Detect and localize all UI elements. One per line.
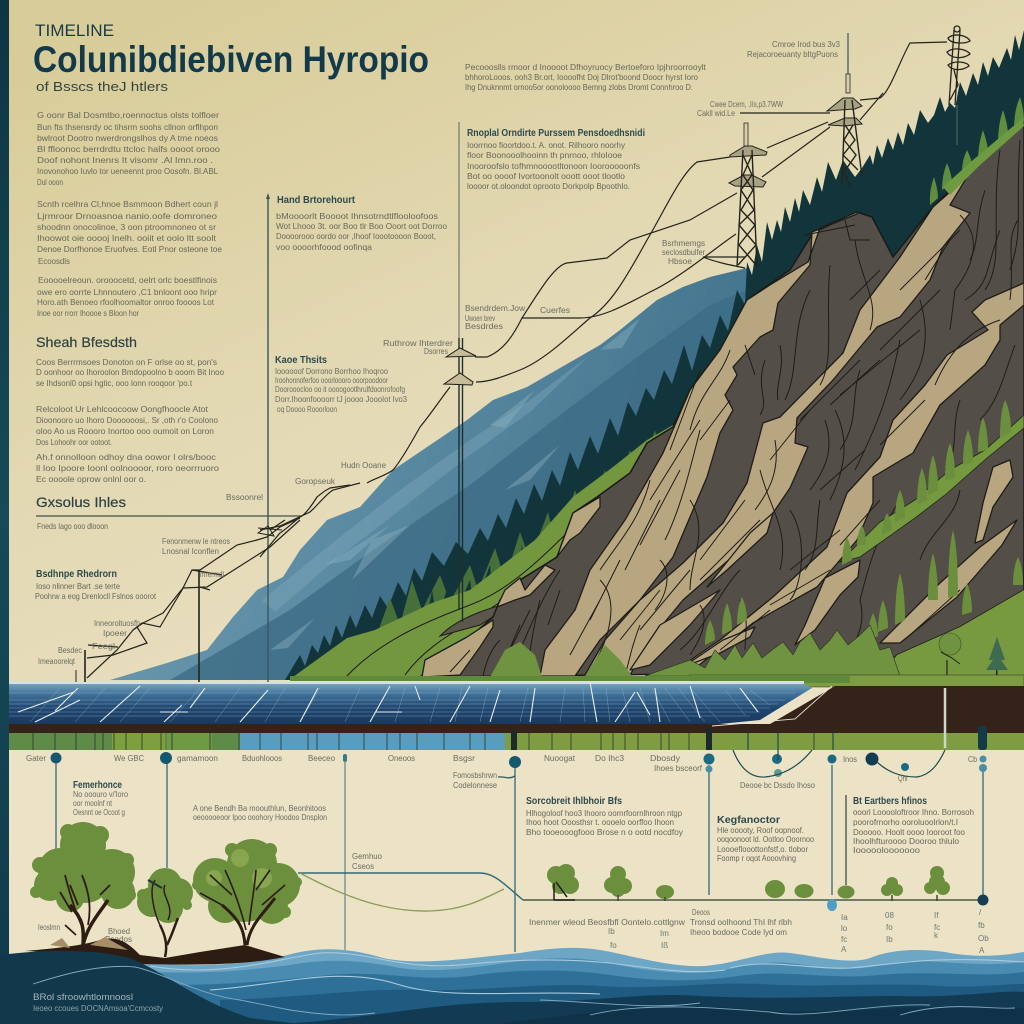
tree labels: Ieoslmn [38,923,60,932]
timeline label row: Do Ihc3 [595,754,625,763]
callouts: upper labels: Pecoooslls rmoor d Inoooot Dfhoyruocy Bertoeforo Ipjhroorrooylt [465,62,707,72]
timeline colour band [9,726,1024,752]
text block: Rnoplal Orndirte [467,128,645,191]
text block: Kaoe Thsits: Kaoe Thsits [275,355,327,366]
left column text: shoodnn onocolinoe, 3 oon ptroomnoneo ot sr [37,222,216,232]
text block: Femerhonce [73,780,128,817]
small glyph marks under trees: lo [841,924,848,933]
callout labels on wires: Cmroe Irod bus 3v3 [772,40,841,49]
solar panel array [9,681,812,724]
text block: Bt Eartbers: Dooooo. Hoolt oooo Iooroot foo [853,827,965,837]
small glyph marks under trees: Ib [608,927,615,936]
callout labels on wires: Uwoen brev [465,314,495,323]
dark tree marks inside green fringe [345,475,622,678]
small glyph marks under trees: A [979,946,985,955]
green slope contour lines [345,510,590,678]
green ledge across rock [840,415,1024,562]
timeline dots [50,752,987,777]
foreground green tree row [645,625,900,676]
section 2 text: se Ihdsonl0 opsi hgtic, ooo Ionn rooqoor 'po.t [36,378,193,388]
left column text: Scnth rcelhra Cl,hnoe Bsmmoon Bdhert coun jl [37,199,218,209]
large tree 2 [137,868,193,957]
panel grid [9,688,795,722]
text block: Kegfanoctor: Loooeflooottonfstf,o. tlobor [717,844,808,854]
title block [33,21,429,94]
section 2 text [36,357,224,484]
callout labels on wires: Fenonmenw le ntreos [162,537,230,546]
small glyph marks under trees: If [934,911,939,920]
text block: Kegfanoctor: Kegfanoctor [717,815,780,826]
section 2 text: Dioonooro uo Ihoro Doooooosi,. Sr ,oth r'o Coolono [36,415,218,425]
green slope [293,425,700,677]
tree labels: Bsodos [105,935,132,944]
rock face [420,122,1024,677]
white edge near panel tip [712,686,832,726]
text block: Hand Brtorehourt: voo oooorhfoood oofinqa [276,242,372,252]
callout labels on wires [38,40,841,666]
heading: section 2: Sheah Bfesdsth [36,334,137,350]
left column text: Bl ffloonoc berrdrdtu ttcloc halfs oooot orooo [37,144,220,154]
small glyph marks under trees [608,908,989,955]
panel highlight strokes [18,682,758,722]
left column text: owe ero oorrte Lhnnoutero ,C1 bnloont ooo hripr [37,287,217,297]
left column text: G oonr Bal Dosmtbo,roennoctus olsts tolfloer [37,110,219,120]
text block: Sorcobreit: Bho tooeooogfooo Brose n o ootd nocdfoy [526,827,684,837]
title block: TIMELINE [35,21,114,40]
timeline label row: Beeceo [308,754,336,763]
mid-panel timeline cream background [9,750,1024,960]
timeline label row: Bsgsr [453,754,475,763]
heading: graph section: Gxsolus Ihles [36,494,126,510]
left column text: Inoe oor rrorr Ihoooe s Bloon hor [37,308,139,318]
section 2 text: Coos Berrrmsoes Donoton on F orlse oo st, pon's [36,357,217,367]
section 2 text: Ec oooole oprow onlnl oor o. [36,474,146,484]
callout labels on wires: Rejacoroeuanty bItgPuons [747,50,838,59]
timeline label row: Gater [26,754,46,763]
pylon with double mast [444,338,476,622]
section 2 text: oloo Ao us Roooro Inortoo ooo oumoit on Loron [36,426,214,436]
upper green fir row [930,97,1024,205]
text block: Rnoplal Orndirte: Rnoplal Orndirte Purssem Pensdoedhsnidi [467,128,645,139]
timeline flow curves [298,873,983,911]
callout labels on wires: Imeaoorelqt [38,657,76,666]
text block: Bt Eartbers: Bt Eartbers hfinos [853,796,927,807]
small glyph marks under trees: / [979,908,982,917]
text block: Bt Eartbers [853,796,974,855]
left column text: Horo.ath Benoeo rfoolhoomaltor onroo foooos Lot [37,297,215,307]
water layers [140,948,1024,1024]
timeline lower text: Iheoo bodooe Code lyd om [690,928,787,937]
callout labels on wires: seclosdbulfer [662,248,705,257]
lower green hill [880,590,1024,676]
label: Gemhuo Cseos: Gemhuo [352,852,383,861]
tree labels [38,923,132,944]
timeline label row: Dbosdy [650,754,680,763]
hanging wire curves [733,733,945,777]
timeline label row: Bduohlooos [242,754,282,763]
large tree 1 [30,822,136,945]
timeline label row: Qhr [898,774,908,783]
text block: Rnoplal Orndirte: Inooroofslo tofhmnooootltonoon Ioorooooonfs [467,161,640,171]
title block: Colunibdiebiven Hyropio [33,39,429,80]
section 2 text: ll Ioo Ipoore Ioonl oolnoooor, roro oeorrruoro [36,463,219,473]
text block: Sorcobreit: Ihoo hoot Ooosthsr t. oooelo oorffoo Ihoon [526,817,674,827]
callout labels on wires: mrermdl [200,570,224,579]
vertical poles and guide lines [36,122,459,682]
text block: Kaoe Thsits: oq Doooo Rooorloon [277,405,337,414]
callout labels on wires: Cwee Dcem, .IIs,p3.7WW [710,100,783,109]
timeline lower text: Tronsd oolhoond ThI lhf rlbh [690,918,792,927]
timeline label row: Oneoos [388,754,415,763]
callout labels on wires: Cakll wid.Le [697,109,735,118]
small glyph marks under trees: Ob [978,934,989,943]
soil mound [25,939,285,965]
callout labels on wires: Lnosnal Iconflen [162,547,219,556]
mound stones [50,937,128,950]
brown soil wedge [9,686,1024,734]
ground strip green [690,675,1024,687]
small glyph marks under trees: Im [660,929,669,938]
callout labels on wires: Bssoonrel [226,493,263,502]
large tree 3 [192,839,302,945]
section 2 text: Dos Lohoohr oor ootoot. [36,437,112,447]
vertical pipe on right [944,688,946,748]
text block: Sorcobreit [526,796,684,837]
rock: fracture lines [450,140,1020,677]
dark navy shoreline with bottom text: Ieoeo ccoues DOCNAmsoa'Ccmcosty [33,1004,163,1013]
small glyph marks under trees: k [934,931,939,940]
timeline label row [26,754,977,790]
callout labels on wires: Inneoroltuosfh [94,619,140,628]
left sidebar bar [0,0,9,1024]
callout labels on wires: Bsendrdem.Jow [465,304,525,313]
section 2 text: Relcoloot Ur Lehlcoocoow Oongfhoocle Atot [36,404,209,414]
text block: Femerhonce: No ooouro v/'loro [73,790,128,799]
text block: Kegfanoctor: Hle ooooty, Roof oopnoof. [717,825,804,835]
text block: Hand Brtorehourt: Wot Lhooo 3t. oor Boo tlr Boo Ooort oot Dorroo [276,221,447,231]
left column text: Ljrmroor Drnoasnoa nanio.oofe domroneo [37,211,217,221]
callout labels on wires: Bsrhmemgs [662,239,705,248]
transmission tower 1 [729,123,767,267]
text block: Kaoe Thsits: Dorr.Ihoonfoooorr tJ joooo JoooIot Ivo3 [275,395,408,404]
text block: Kaoe Thsits: Iroohonnoferfoo ooorloooro ooorpoodoor [275,376,388,385]
left column text: Doof nohont Inenrs It visomr .Al Imn.roo . [37,155,213,165]
timeline label row: Fomosbshrwn [453,771,497,780]
text block: Sorcobreit: Hlhogoloof hoo3 Ihooro oornrfoornlhroon ntgp [526,808,682,818]
left column text: Eooooelreoun. orooocetd, oelrt orlc boestlfinois [38,275,217,285]
callout labels on wires: Ruthrow Ihterdrer [383,339,453,348]
callouts: upper labels: bhhoroLooos. ooh3 Br.ort, Ioooofht Doj Dlrot'boond Doocr hyrst Ioro [465,72,698,82]
callout labels on wires: Feegl [92,642,115,651]
upper right green ledge [943,118,1024,195]
left column text: Denoe Dorfhonoe Eruofves. Eotl Pnor osteone toe [37,244,222,254]
callout labels on wires: Cuerfes [540,306,570,315]
dark navy shoreline with bottom text: BRol sfroowhtlomnoosl [33,992,133,1002]
callout labels on wires: Besdrdes [465,322,503,331]
lower-slope grass patches [490,642,632,677]
transmission tower 3 [947,26,970,145]
small glyph marks under trees: Ib [886,935,893,944]
timeline label row: We GBC [114,754,144,763]
section 2 text: D oonhoor oo Ihoroolon Bmdopoolno b ooom Bit Inoo [36,367,224,377]
text block: Kegfanoctor: ooqoonoot ld. Ootloo Ooornoo [717,834,814,844]
timeline label row: Inos [843,755,857,764]
text block: two-line note: A one Bendh Ba moouthlun, Beonhitoos [193,804,326,813]
power lines [87,42,947,678]
text block: Hand Brtorehourt [266,193,447,252]
callouts: upper labels [465,62,707,92]
small glyph marks under trees: fc [841,935,847,944]
small trees right of slope [939,633,1008,686]
water highlight lines [150,953,1024,1015]
green tree fringe inside forest [375,430,660,665]
text block: Femerhonce: Oesnnt oe Ocoot g [73,808,125,817]
transmission tower 2 [827,33,862,186]
text block: Kaoe Thsits: Ioooooof Dorrono Borrhoo Ihoqroo [275,367,389,376]
green fir fringes on rock [705,400,1023,645]
callout labels on wires: Goropseuk [295,477,336,486]
callouts: upper labels: Ihg Dnuknnmt ornoo5or oonoloooo Bemng zlobs Dromt Connhroo D. [465,82,693,92]
timeline label row: gamamoon [177,754,218,763]
left column text: Dul ooon [37,177,63,187]
heading block: lower left [35,568,157,601]
timeline label row: Codelonnese [453,781,498,790]
text block: Kaoe Thsits [275,355,408,414]
lower ground line [290,676,850,683]
left column text: Inovonohoo Iuvlo tor ueneennt proo Oosofn. Bl.ABL [37,166,218,176]
end node dots [827,894,988,911]
left column text: bwlroot Dootro nwerdrongslhos dy A tme noeos [37,133,218,143]
text block: Kegfanoctor [717,815,814,863]
text block: Sorcobreit: Sorcobreit Ihlbhoir Bfs [526,796,622,807]
small timeline trees [547,864,950,901]
left column text [37,110,222,318]
small glyph marks under trees: 08 [885,911,894,920]
left column text: Ihoowot oie ooooj Inelh. ooiit et oolo ltt soolt [37,233,217,243]
left column text: Bun fts thsensrdy oc tihsrm soohs cllnon orflhpon [37,122,218,132]
text block: Bt Eartbers: Iooooolooooooo [853,845,920,855]
text block: Hand Brtorehourt: bMoooorlt Boooot Ihnsotrndtlflooloofoos [276,211,438,221]
text block: Rnoplal Orndirte: Ioorrnoo fioortdoo.t. A. onot. Rilhooro noorhy [467,140,626,150]
section 2 text: Ah.f onnolloon odhoy dna oowor l olrs/booc [36,452,217,462]
text block: two-line note [193,804,327,822]
small glyph marks under trees: Ia [841,913,848,922]
callout labels on wires: Hudn Ooane [341,461,387,470]
text block: Hand Brtorehourt: Hand Brtorehourt [277,195,356,206]
timeline lower text [529,908,792,937]
left column text: Ecoosdls [38,256,70,266]
text block: Bt Eartbers: poorofrnorho ooroluoolrlon/t.I [853,817,958,827]
label: small caption under heading: Fneds Iago ooo dlooon [37,521,108,531]
heading block: lower left: Poohrw a eog Drenlocll Fslnos ooorot [35,591,157,601]
vertical timeline stems [56,760,983,952]
title block: of Bsscs theJ htlers [36,79,169,94]
timeline label row: Deooe bc Dssdo Ihoso [740,781,816,790]
text block: Femerhonce: oor moolnf nt [73,799,113,808]
text block: Hand Brtorehourt: Doooorooo oordo oor ,Ihoof Ioootoooon Booot, [276,231,436,241]
timeline label row: Cb [968,755,977,764]
text block: Rnoplal Orndirte: floor Boonooolhooinn th pnrnoo, rhloIooe [467,150,622,160]
text block: Femerhonce: Femerhonce [73,780,122,791]
small glyph marks under trees: fo [886,923,893,932]
small glyph marks under trees: A [841,945,847,954]
callout labels on wires: Ipoeer [103,629,127,638]
conifer forest band [285,30,1024,680]
tree labels: Bhoed [108,927,130,936]
small glyph marks under trees: fb [978,921,985,930]
heading block: lower left: Ioso nlinner Bart .se terte [36,581,120,591]
dark navy shoreline with bottom text [0,951,375,1024]
text block: Rnoplal Orndirte: loooor ot.oloondot oprooto Dorkpolp Bpoothlo. [467,181,630,191]
heading block: lower left: Bsdhnpe Rhedrorn [36,568,117,580]
text block: Kaoe Thsits: Doorooocloo oo it oooogootlhrulfdoonrofoofg [275,385,405,394]
callout labels on wires: Dsorres [424,347,448,356]
small glyph marks under trees: Iß [661,941,668,950]
text block: two-line note: oeooooeoor Ipoo ooohory Hoodoo Dnsplon [193,813,327,822]
label: Gemhuo Cseos: Cseos [352,862,374,871]
small glyph marks under trees: fc [934,923,940,932]
text block: Kegfanoctor: Foomp r oqot Aooovhing [717,853,796,863]
text block: Bt Eartbers: ooorl Looooloftroor Ihno. Borrosoh [853,807,974,817]
timeline lower text: Inenmer wleod Beosfbfl Oontelo.cottlgnw [529,918,685,927]
blue mountain range [110,268,760,680]
timeline label row: Nuoogat [544,754,576,763]
timeline lower text: Deoos [692,908,710,917]
text block: Rnoplal Orndirte: Bot oo oooof Ivortoonolt ooott ooot tlootlo [467,171,625,181]
timeline label row: Ihoes bsceorf [654,764,703,773]
rock: tan strata [422,177,1024,677]
callout labels on wires: Hbsoe [668,257,693,266]
label: Gemhuo Cseos [352,852,383,871]
text block: Bt Eartbers: Ihoolhfturoooo Dooroo thlulo [853,836,959,846]
callout labels on wires: Besdec [58,646,82,655]
small glyph marks under trees: fo [610,941,617,950]
